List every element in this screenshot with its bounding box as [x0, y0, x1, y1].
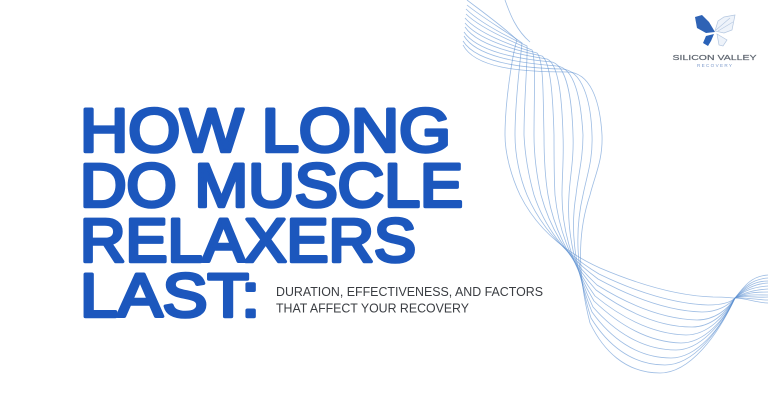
title: LAST: [80, 262, 260, 330]
subtitle: DURATION, EFFECTIVENESS, AND FACTORS [276, 285, 543, 299]
icon: butterfly [695, 15, 735, 46]
title: DO MUSCLE [80, 152, 463, 220]
logo tagline: RECOVERY [697, 63, 732, 68]
title [80, 96, 463, 330]
logo name: SILICON VALLEY [672, 53, 756, 62]
title: RELAXERS [80, 206, 416, 274]
subtitle: THAT AFFECT YOUR RECOVERY [276, 302, 470, 316]
logo [672, 15, 756, 68]
title: HOW LONG [80, 96, 451, 164]
decorative wave ribbon [463, 0, 768, 373]
subtitle [276, 285, 543, 316]
